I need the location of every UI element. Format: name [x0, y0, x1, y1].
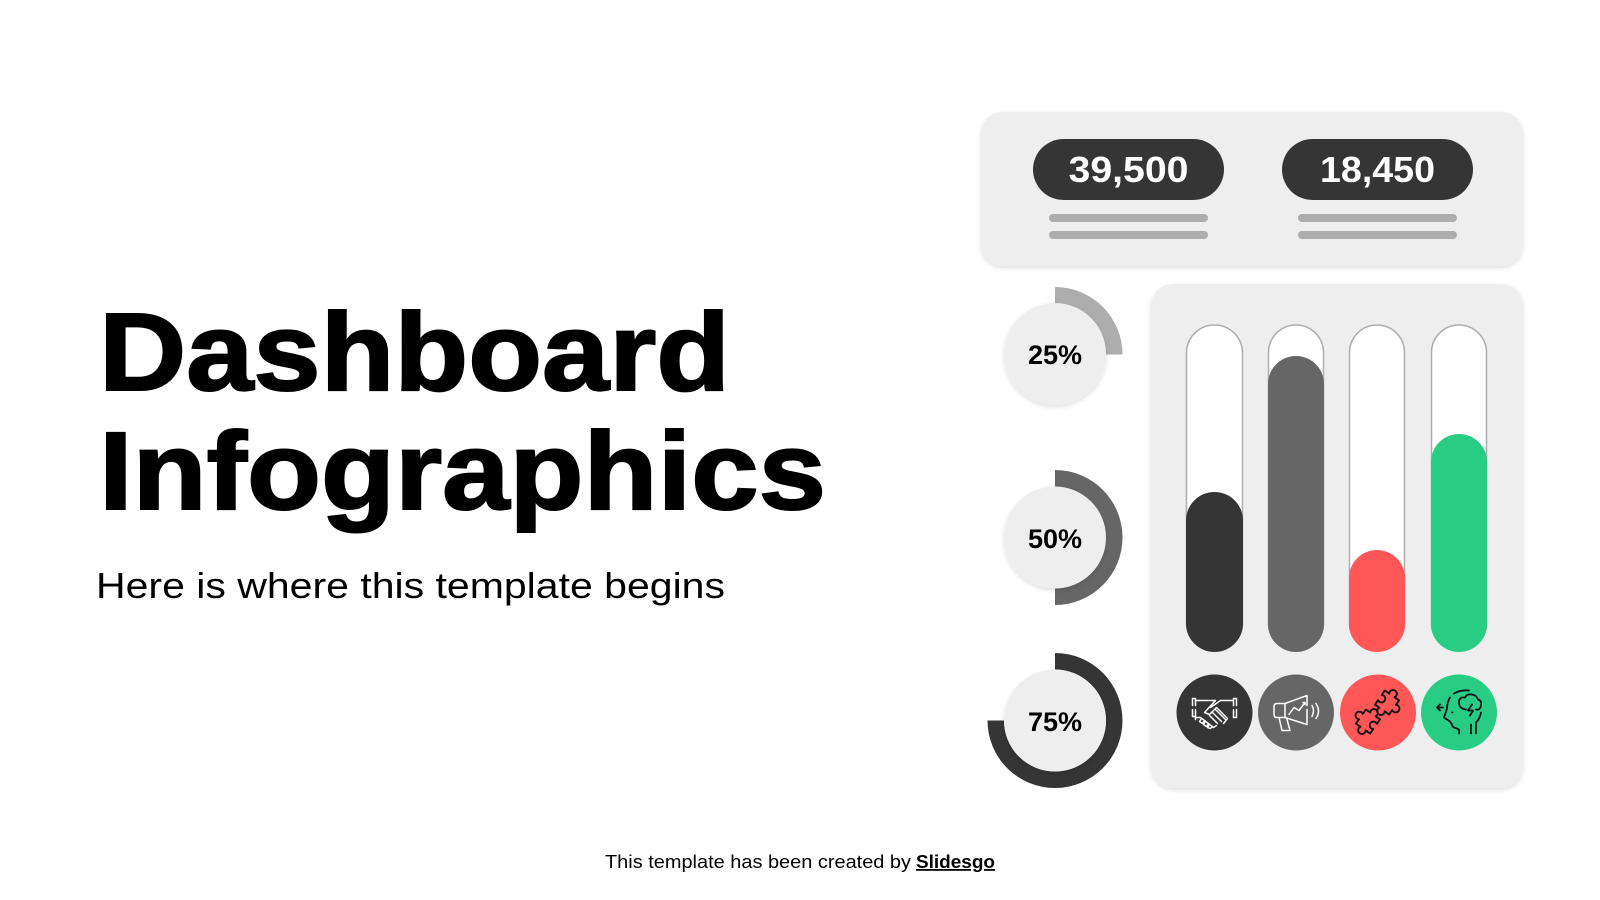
stat: 18,450 [1282, 139, 1473, 239]
title: Dashboard [99, 291, 730, 414]
subtitle: Here is where this template begins [96, 565, 725, 606]
donut: 50%: 50% [1028, 524, 1082, 554]
stat: 39,500: 39,500 [1068, 149, 1188, 190]
donut: 50% [1004, 470, 1122, 605]
donut: 25% [1004, 287, 1122, 405]
title: Infographics [99, 410, 826, 533]
bar: green [1431, 325, 1487, 652]
panel: top stats [981, 112, 1523, 266]
icon: handshake [1176, 674, 1252, 750]
icon: megaphone [1258, 674, 1334, 750]
bar: grey [1268, 325, 1324, 652]
puzzle piece: lower left [1348, 701, 1383, 738]
stat: 39,500 [1033, 139, 1224, 239]
bar: red [1349, 325, 1405, 652]
bar: dark [1186, 325, 1243, 652]
footer credit: This template has been created by [605, 852, 911, 872]
puzzle piece: upper right [1372, 686, 1407, 723]
donut: 25%: 25% [1028, 340, 1082, 370]
footer credit: Slidesgo [916, 852, 995, 872]
icon: puzzle pieces [1340, 674, 1416, 750]
panel: bar gauges [1151, 284, 1523, 788]
donut: 75%: 75% [1028, 707, 1082, 737]
donut: 75% [988, 653, 1122, 788]
icon: head with cloud [1421, 674, 1497, 750]
title [99, 291, 826, 533]
stat: 18,450: 18,450 [1320, 149, 1435, 190]
